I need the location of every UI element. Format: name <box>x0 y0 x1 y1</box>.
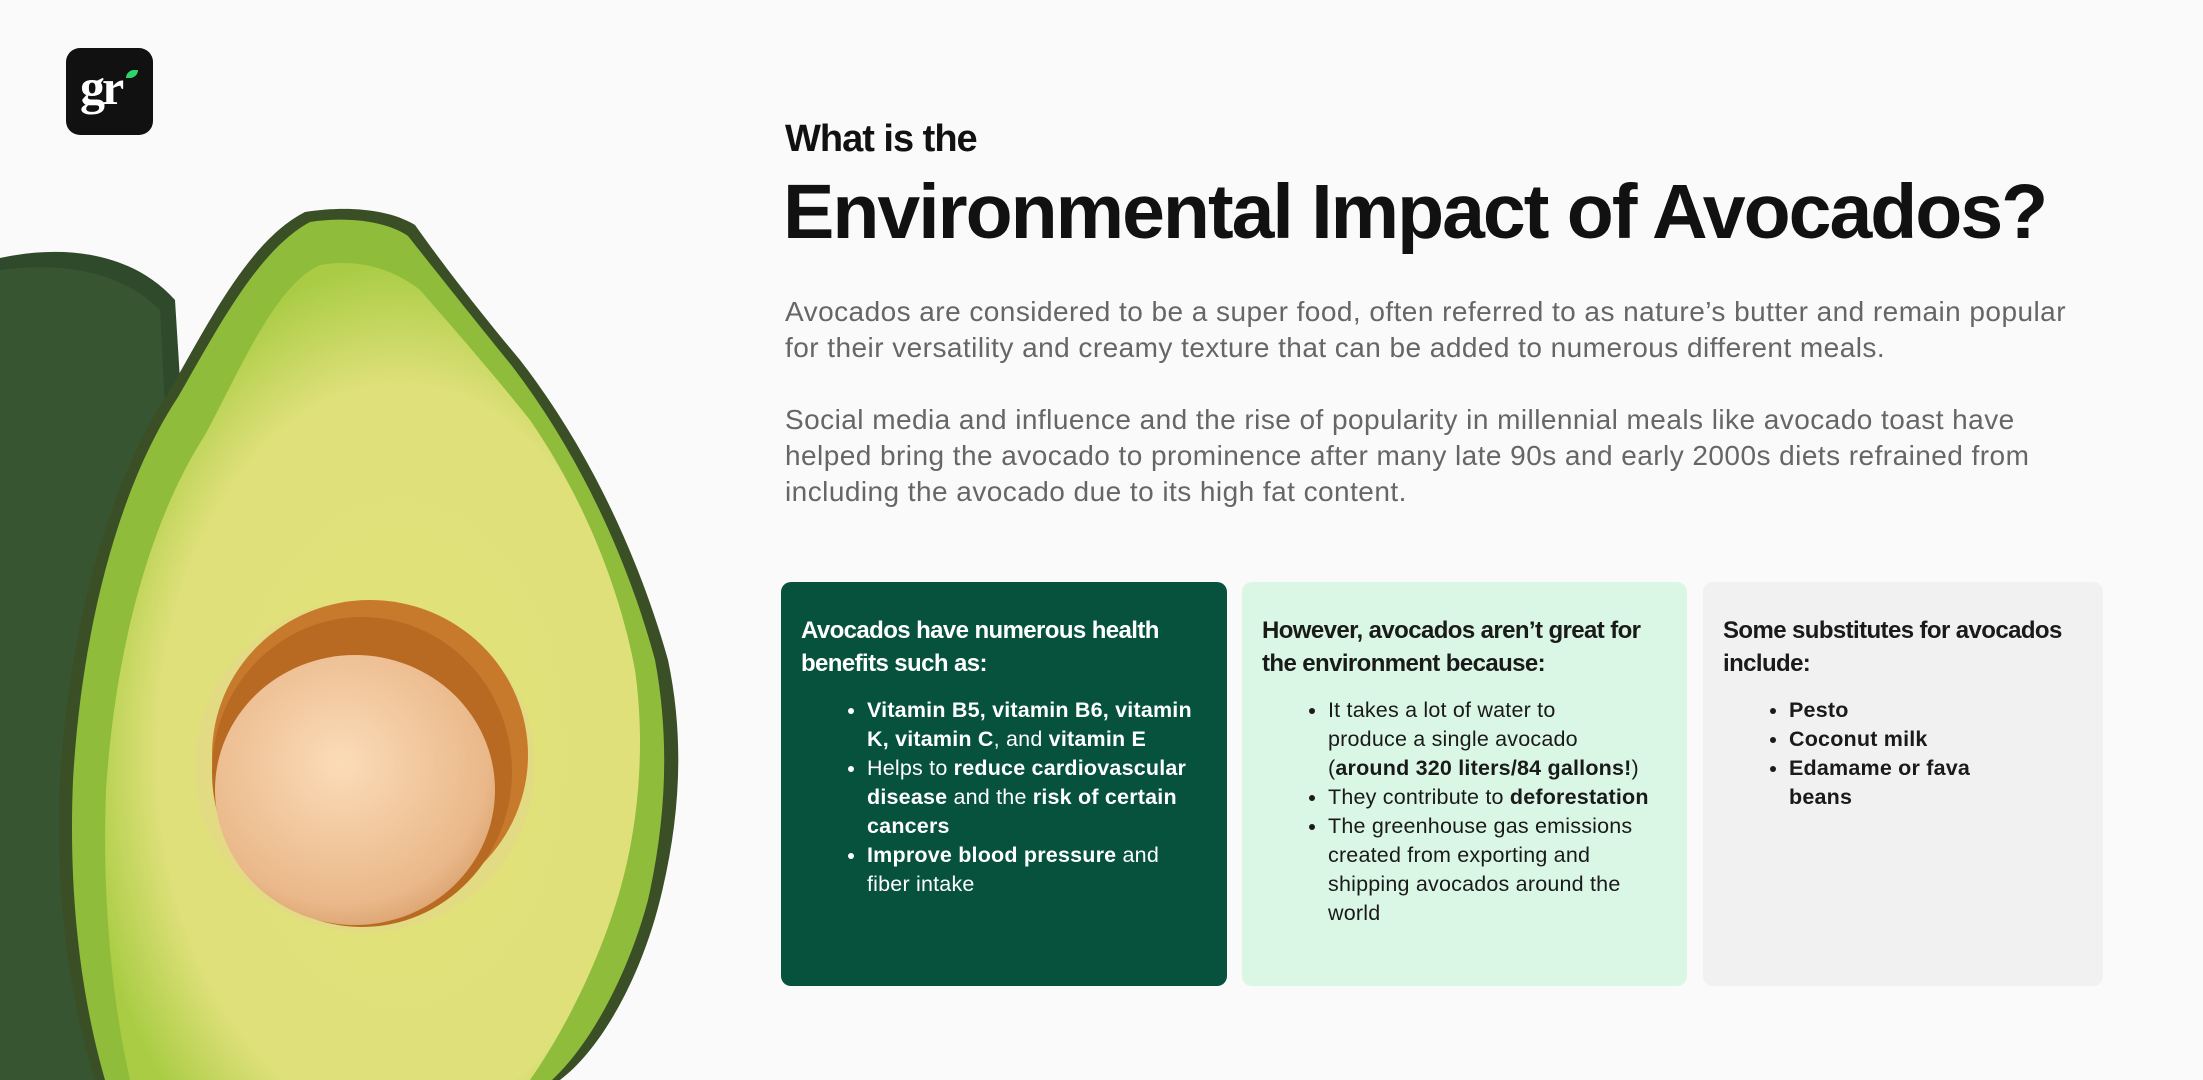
heading: substitutes: Some substitutes for avocados include: <box>1723 617 2062 677</box>
list: impacts: It takes a lot of water to <box>1328 698 1555 722</box>
subtitle: What is the: What is the <box>785 118 977 160</box>
list: benefits: Helps to reduce cardiovascular disease and the risk of certain cancers <box>867 756 1186 838</box>
logo: gr <box>80 59 121 115</box>
list: benefits <box>848 698 1192 896</box>
list: substitutes: Pesto <box>1789 698 1849 722</box>
list: substitutes <box>1770 698 1970 809</box>
heading: health benefits: Avocados have numerous health benefits such as: <box>801 617 1159 677</box>
logo <box>66 48 153 135</box>
list: substitutes: Coconut milk <box>1789 727 1928 751</box>
panel: health benefits <box>781 582 1227 986</box>
panel: substitutes <box>1703 582 2103 986</box>
list: impacts: They contribute to deforestation <box>1328 785 1649 809</box>
illustration: avocado <box>0 208 678 1080</box>
heading: environment: However, avocados aren’t great for the environment because: <box>1262 617 1640 677</box>
list: benefits: Vitamin B5, vitamin B6, vitamin K, vitamin C, and vitamin E <box>867 698 1192 751</box>
intro paragraph 1: Avocados are considered to be a super food, often referred to as nature’s butter and remain popular for their versatility and creamy texture that can be added to numerous different meals. <box>785 296 2066 363</box>
list: impacts: The greenhouse gas emissions created from exporting and shipping avocados around the world <box>1328 814 1632 925</box>
panel: environmental impact <box>1242 582 1687 986</box>
title: Environmental Impact of Avocados? <box>783 169 2046 255</box>
intro paragraph 2: Social media and influence and the rise of popularity in millennial meals like avocado toast have helped bring the avocado to prominence after many late 90s and early 2000s diets refrained from including the avocado due to its high fat content. <box>785 404 2029 507</box>
list: impacts <box>1309 698 1649 925</box>
list: impacts: produce a single avocado (around 320 liters/84 gallons!) <box>1328 727 1639 780</box>
list: substitutes: Edamame or fava beans <box>1789 756 1970 809</box>
list: benefits: Improve blood pressure and fiber intake <box>867 843 1159 896</box>
